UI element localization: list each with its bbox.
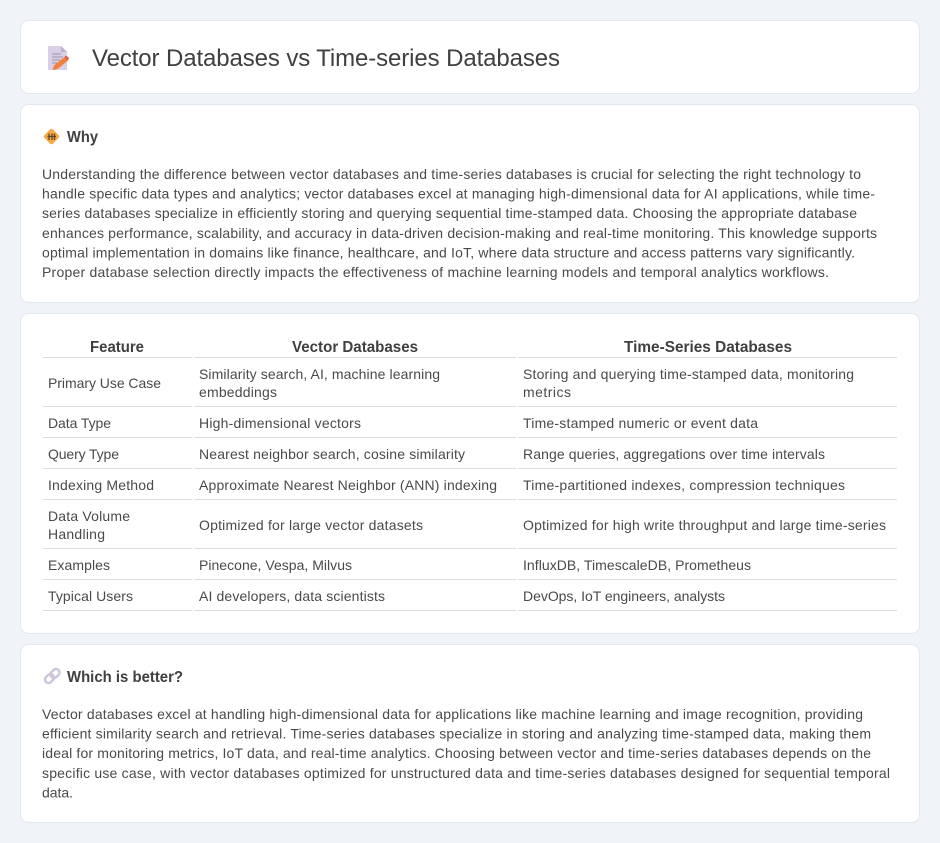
row: indexing method: Time-partitioned indexes, compression techniques: [523, 477, 845, 493]
row: indexing method: Indexing Method: [48, 477, 154, 493]
row: data type: High-dimensional vectors: [199, 415, 361, 431]
text block: verdict: ideal for monitoring metrics, IoT data, and real-time analytics. Choosing between vector and time-series databases depends on the: [42, 745, 871, 761]
row: indexing method: [43, 477, 897, 500]
row: query type: Nearest neighbor search, cosine similarity: [199, 446, 465, 462]
row: data volume handling: Optimized for high write throughput and large time-series: [523, 517, 886, 533]
row: query type: Range queries, aggregations over time intervals: [523, 446, 825, 462]
table header row: Feature: [90, 339, 144, 356]
heading: why: Why: [67, 129, 98, 146]
title: Vector Databases vs Time-series Databases: [92, 45, 560, 72]
text block: verdict: [42, 706, 890, 800]
icon: warning diamond: [43, 128, 60, 145]
row: primary use case: [43, 366, 897, 407]
panel: title header: [20, 20, 920, 94]
row: typical users: DevOps, IoT engineers, analysts: [523, 588, 725, 604]
row: primary use case: Storing and querying time-stamped data, monitoring: [523, 366, 854, 382]
row: data volume handling: [43, 508, 897, 549]
panel: which is better: [20, 644, 920, 822]
text block: verdict: data.: [42, 784, 73, 800]
row: primary use case: metrics: [523, 384, 571, 400]
row: primary use case: Primary Use Case: [48, 375, 161, 391]
row: examples: Pinecone, Vespa, Milvus: [199, 557, 352, 573]
table header row: Time-Series Databases: [624, 339, 792, 356]
row: examples: InfluxDB, TimescaleDB, Prometheus: [523, 557, 751, 573]
row: data volume handling: Data Volume: [48, 508, 130, 524]
row: data type: Data Type: [48, 415, 111, 431]
row: query type: [43, 446, 897, 469]
icon: memo with pencil: [48, 46, 69, 70]
panel: why: [20, 104, 920, 302]
table header row: [43, 339, 897, 358]
row: indexing method: Approximate Nearest Neighbor (ANN) indexing: [199, 477, 497, 493]
row: data volume handling: Optimized for large vector datasets: [199, 517, 423, 533]
row: data type: Time-stamped numeric or event data: [523, 415, 758, 431]
panel: comparison table: [20, 314, 920, 634]
row: typical users: Typical Users: [48, 588, 133, 604]
text block: why explanation: series databases specialize in efficiently storing and querying sequential time-stamped data. Choosing the appropriate database: [42, 205, 857, 221]
text block: why explanation: optimal implementation in domains like finance, healthcare, and IoT, where data structure and access patterns vary significantly.: [42, 244, 855, 260]
text block: why explanation: enhances performance, scalability, and accuracy in data-driven decision-making and real-time monitoring. This knowledge supports: [42, 225, 877, 241]
row: typical users: AI developers, data scientists: [199, 588, 385, 604]
text block: why explanation: Understanding the difference between vector databases and time-series databases is crucial for selecting the right technology to: [42, 166, 861, 182]
row: query type: Query Type: [48, 446, 119, 462]
row: primary use case: Similarity search, AI, machine learning: [199, 366, 440, 382]
row: data volume handling: Handling: [48, 526, 105, 542]
text block: why explanation: handle specific data types and analytics; vector databases excel at managing high-dimensional data for AI applications, while time-: [42, 186, 875, 202]
row: examples: [43, 557, 897, 580]
row: typical users: [43, 588, 897, 611]
text block: verdict: Vector databases excel at handling high-dimensional data for applications like machine learning and image recognition, providing: [42, 706, 863, 722]
icon: chain link: [43, 667, 61, 685]
text block: why explanation: [42, 166, 877, 280]
text block: verdict: efficient similarity search and retrieval. Time-series databases specialize in storing and analyzing time-stamped data, making them: [42, 726, 871, 742]
row: data type: [43, 415, 897, 438]
table header row: Vector Databases: [292, 339, 418, 356]
text block: why explanation: Proper database selection directly impacts the effectiveness of machine learning models and temporal analytics workflows.: [42, 264, 829, 280]
heading: which is better: Which is better?: [67, 669, 183, 686]
text block: verdict: specific use case, with vector databases optimized for unstructured data and time-series databases designed for sequential temporal: [42, 765, 890, 781]
row: primary use case: embeddings: [199, 384, 277, 400]
row: examples: Examples: [48, 557, 110, 573]
